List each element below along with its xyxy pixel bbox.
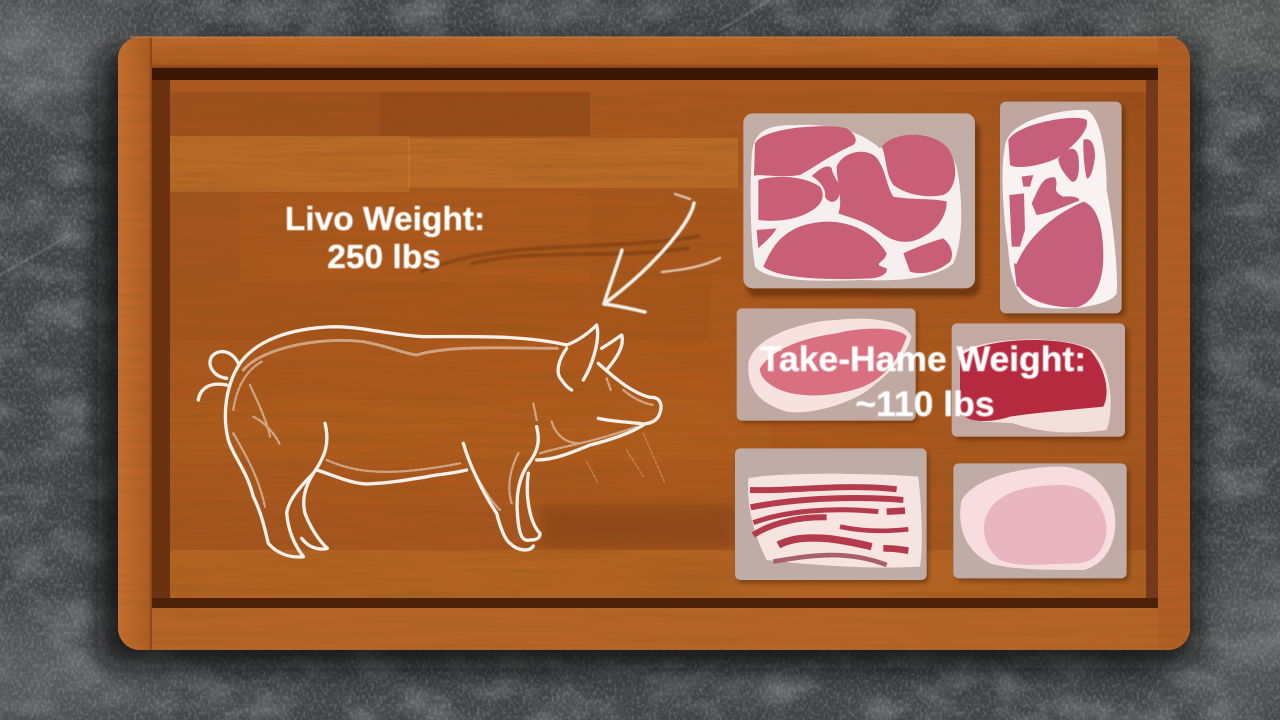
- label: take-home weight: [760, 339, 1086, 424]
- pig back and rear: [225, 327, 567, 557]
- label: live weight: Livo Weight:: [285, 201, 485, 238]
- meat package: top right chop: [1000, 102, 1125, 317]
- pig ears: [558, 325, 622, 390]
- label: take-home weight: ~110 lbs: [855, 384, 995, 424]
- wood surface: [170, 92, 1146, 598]
- chalk arrow: [604, 194, 720, 312]
- meat package: bottom right pale chop: [953, 463, 1129, 582]
- pig jaw: [537, 425, 643, 460]
- pig legs: [287, 423, 327, 557]
- pig tail: [198, 352, 238, 400]
- label: live weight: 250 lbs: [327, 239, 441, 276]
- meat package: middle left loin: [737, 308, 918, 423]
- pig face: [598, 363, 661, 424]
- meat package: middle right red steak: [952, 323, 1128, 440]
- cutting board: [98, 37, 1198, 668]
- meat package: top left steaks: [743, 113, 980, 297]
- pig belly: [317, 470, 467, 484]
- groove: [152, 68, 1158, 608]
- wood planks: [170, 92, 1146, 598]
- board frame: [118, 37, 1190, 650]
- label: take-home weight: Take-Hame Weight:: [760, 339, 1086, 379]
- label: live weight: [285, 201, 485, 276]
- meat package: bottom left bacon: [735, 448, 929, 583]
- chalk pig outline: [198, 325, 665, 557]
- board shadow: [98, 46, 1198, 668]
- pig chalk shading: [233, 340, 665, 510]
